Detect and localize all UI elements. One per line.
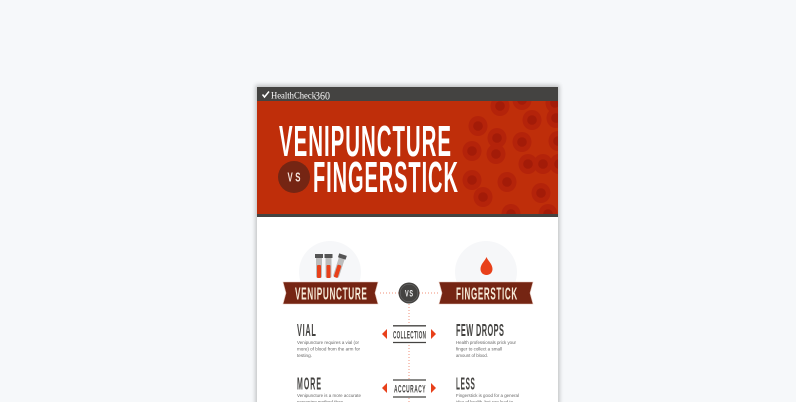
left text: vial: testing. xyxy=(297,353,312,359)
banner xyxy=(439,282,533,304)
row: accuracy xyxy=(297,374,520,402)
icon: check mark xyxy=(262,92,269,97)
dotted connectors xyxy=(380,293,438,402)
center label: collection xyxy=(382,326,436,342)
blood cells xyxy=(462,101,558,214)
left text: more: Venipuncture is a more accurate xyxy=(297,393,361,399)
right text: few drops xyxy=(456,320,517,359)
right text: few drops: finger to collect a small xyxy=(456,346,502,352)
vs badge xyxy=(278,161,310,193)
logo number: 360 xyxy=(315,88,330,102)
title line 2: FINGERSTICK xyxy=(313,153,458,202)
left text: more: MORE xyxy=(297,374,321,393)
panel: venipuncture heading xyxy=(283,241,378,304)
right text: few drops: amount of blood. xyxy=(456,353,488,359)
right text: few drops: FEW DROPS xyxy=(456,320,504,340)
left text: vial xyxy=(297,320,361,359)
left text: vial: more) of blood from the arm for xyxy=(297,346,360,352)
right text: less: LESS xyxy=(456,374,475,393)
right text: less xyxy=(456,374,520,402)
left text: vial: Venipuncture requires a vial (or xyxy=(297,340,359,346)
left text: vial: VIAL xyxy=(297,320,316,340)
vs connector badge xyxy=(398,282,420,304)
banner label: VENIPUNCTURE xyxy=(295,284,367,303)
center label: collection: COLLECTION xyxy=(393,328,426,341)
vs badge: VS xyxy=(288,171,301,185)
vs connector badge: VS xyxy=(405,288,413,299)
icon: test tubes xyxy=(299,241,361,303)
title line 1: VENIPUNCTURE xyxy=(279,118,451,166)
top bar xyxy=(257,87,558,102)
center label: accuracy xyxy=(382,380,436,397)
icon: blood drop xyxy=(455,241,517,303)
panel: fingerstick heading xyxy=(439,241,533,304)
logo: HealthCheck xyxy=(271,90,316,100)
left text: more xyxy=(297,374,362,402)
right text: few drops: Health professionals prick your xyxy=(456,340,516,346)
infographic card xyxy=(257,87,568,402)
center label: accuracy: ACCURACY xyxy=(394,382,426,395)
header panel xyxy=(257,101,558,217)
right text: less: Fingerstick is good for a general xyxy=(456,393,519,399)
banner xyxy=(283,282,378,304)
row: collection xyxy=(297,320,517,359)
banner label: FINGERSTICK xyxy=(456,284,517,303)
card shadow xyxy=(256,85,560,402)
